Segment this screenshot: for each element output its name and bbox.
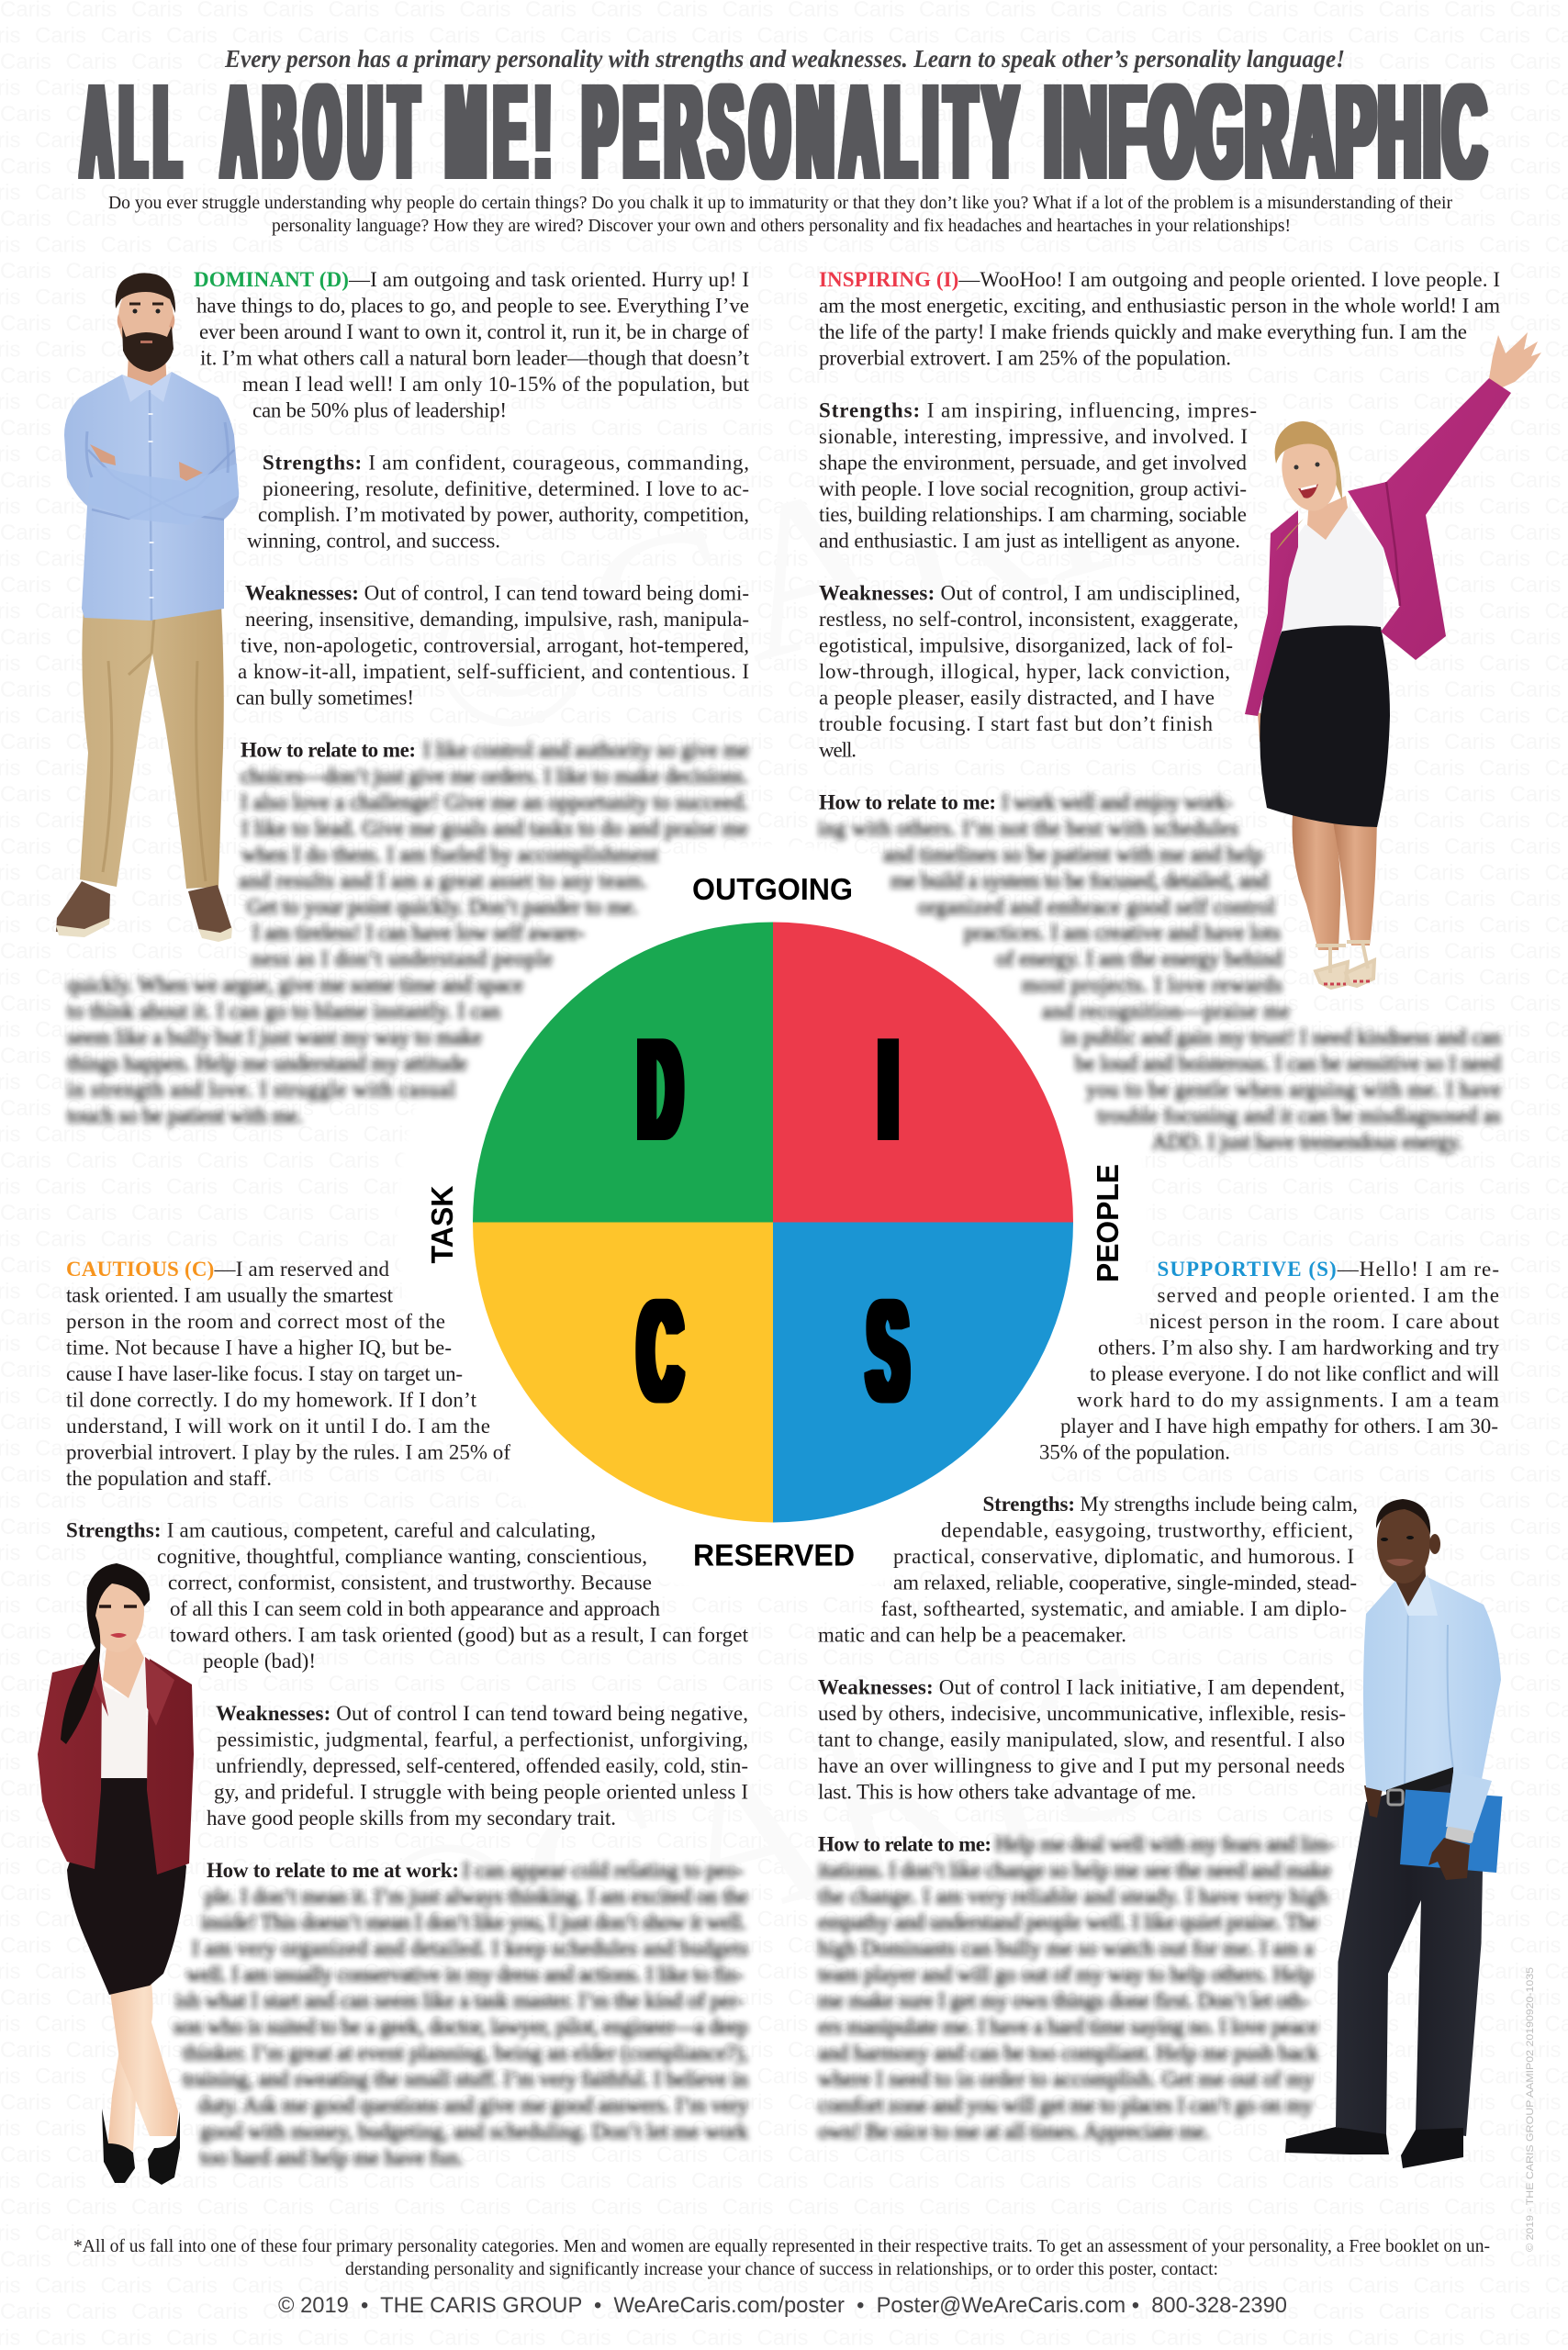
hair (1376, 1499, 1430, 1535)
supportive weaknesses: used by others, indecisive, uncommunicative, inflexible, resis- (818, 1702, 1346, 1725)
title: PERSONALITY (583, 60, 1017, 207)
dominant how to relate: I am tireless! I can have low self aware- (252, 922, 585, 945)
dominant how to relate: I also love a challenge! Give me an opportunity to succeed. (241, 790, 748, 813)
dominant strengths (247, 451, 749, 553)
legs (1293, 814, 1340, 950)
supportive strengths: am relaxed, reliable, cooperative, single-minded, stead- (893, 1572, 1357, 1595)
cautious strengths: cognitive, thoughtful, compliance wanting, conscientious, (157, 1545, 647, 1568)
supportive how to relate: itations. I don’t like change so help me see the need and make (818, 1859, 1331, 1882)
inspiring description (819, 268, 1500, 369)
face (91, 1570, 144, 1652)
cautious how to relate: son who is suited to be a geek, doctor, lawyer, pilot, engineer—a deep (174, 2016, 748, 2039)
supportive how to relate: and harmony and can be too compliant. Help me push back (818, 2042, 1318, 2065)
hair (1275, 421, 1337, 468)
dominant how to relate: choices—don’t just give me orders. I like to make decisions. (241, 765, 748, 788)
supportive description: 35% of the population. (1039, 1440, 1230, 1463)
supportive how to relate: the change. I am very reliable and steady. I have very high (818, 1885, 1329, 1908)
intro paragraph: Do you ever struggle understanding why people do certain things? Do you chalk it up to immaturity or that they don’t like you? What if a lot of the problem is a misunderstanding of their (108, 193, 1452, 213)
inspiring weaknesses: trouble focusing. I start fast but don’t finish (819, 712, 1214, 735)
cautious weaknesses: Weaknesses: Out of control I can tend toward being negative, (216, 1702, 748, 1725)
cautious how to relate: duty. Ask me good questions and give me good answers. I’m very (198, 2094, 749, 2117)
shoes (102, 2109, 135, 2183)
cautious how to relate: How to relate to me at work: (207, 1859, 459, 1882)
cautious description: the population and staff. (66, 1467, 272, 1490)
title: INFOGRAPHIC (1045, 57, 1485, 206)
cautious how to relate: inside! This doesn’t mean I don’t like you, I just don’t show it well. (201, 1911, 746, 1934)
dominant weaknesses: a know-it-all, impatient, self-sufficient, and contentious. I (238, 660, 749, 683)
inspiring how to relate: ADD. I just have tremendous energy. (1152, 1131, 1462, 1153)
inspiring how to relate: you to be gentle when arguing with me. I have (1086, 1079, 1501, 1102)
dominant weaknesses: tive, non-apologetic, controversial, arrogant, hot-tempered, (241, 634, 749, 657)
dominant description: can be 50% plus of leadership! (252, 398, 507, 421)
inspiring weaknesses: well. (819, 738, 857, 762)
dominant how to relate: How to relate to me: (241, 738, 416, 762)
supportive how to relate: empathy and understand people well. I like quiet praise. The (818, 1911, 1318, 1934)
hair (61, 1563, 150, 1744)
supportive description: served and people oriented. I am the (1157, 1283, 1499, 1307)
neck (127, 353, 167, 399)
inspiring strengths: sionable, interesting, impressive, and involved. I (819, 425, 1248, 448)
background watermark: ©CARIS (335, 1609, 1186, 2056)
folder (1400, 1790, 1502, 1873)
eyes and mouth (1294, 464, 1298, 470)
dominant description: ever been around I want to own it, control it, run it, be in charge of (199, 320, 749, 343)
collar (92, 1657, 174, 1726)
skirt (67, 1778, 186, 1995)
supportive how to relate: ers manipulate me. I have a hard time saying no. I love peace (818, 2016, 1318, 2039)
cautious weaknesses: gy, and prideful. I struggle with being people oriented unless I (214, 1780, 748, 1803)
inspiring how to relate: organized and embrace good self control (918, 895, 1275, 918)
watch (1445, 1827, 1474, 1843)
hair (116, 273, 175, 313)
supportive strengths: matic and can help be a peacemaker. (818, 1624, 1126, 1647)
cautious strengths: correct, conformist, consistent, and trustworthy. Because (168, 1572, 652, 1595)
intro paragraph (108, 193, 1452, 236)
supportive how to relate (818, 1832, 1335, 2143)
neck (1390, 1561, 1426, 1606)
shoes (1285, 2127, 1389, 2154)
cautious strengths: toward others. I am task oriented (good) but as a result, I can forget (170, 1624, 749, 1647)
footnote (73, 2236, 1490, 2279)
sandals (1316, 946, 1348, 988)
supportive description (1039, 1258, 1500, 1463)
tagline: Every person has a primary personality with strengths and weaknesses. Learn to speak other’s personality language! (224, 45, 1345, 73)
quadrant I (773, 922, 1073, 1223)
inspiring description: the life of the party! I make friends quickly and make everything fun. I am the (819, 320, 1467, 343)
supportive description: nicest person in the room. I care about (1149, 1310, 1500, 1333)
cautious how to relate: training, and sweating the small stuff. I’m very faithful. I believe in (183, 2068, 749, 2091)
cautious description: CAUTIOUS (C)—I am reserved and (66, 1258, 389, 1281)
inspiring how to relate: be loud and boisterous. I can be sensitive so I need (1075, 1052, 1502, 1075)
cuff (1446, 1772, 1492, 1833)
left hand (1258, 712, 1269, 744)
dominant how to relate: I like to lead. Give me goals and tasks to do and praise me (241, 817, 748, 840)
DISC letters: C (639, 1273, 681, 1431)
title: ABOUT (222, 58, 418, 206)
cautious description: time. Not because I have a higher IQ, but be- (66, 1336, 452, 1359)
cautious strengths: people (bad)! (203, 1650, 316, 1673)
supportive how to relate: where I need to in order to accomplish. Get me out of my (818, 2068, 1315, 2091)
supportive strengths: dependable, easygoing, trustworthy, efficient, (941, 1519, 1353, 1542)
cautious how to relate: I am very organized and detailed. I keep schedules and budgets (192, 1937, 748, 1960)
supportive how to relate: own! Be nice to me at all times. Appreciate me. (818, 2121, 1210, 2143)
dominant how to relate: things happen. Help me understand my attitude (67, 1052, 467, 1075)
supportive description: others. I’m also shy. I am hardworking and try (1098, 1336, 1500, 1359)
inspiring how to relate: most projects. I love rewards (1022, 974, 1282, 997)
blouse (97, 1652, 149, 1778)
panel: cautious (66, 1258, 749, 2169)
dominant description: DOMINANT (D)—I am outgoing and task oriented. Hurry up! I (194, 268, 749, 291)
eyes (129, 303, 163, 305)
inspiring how to relate: me build a system to be focused, detailed, and (890, 869, 1269, 892)
toes (1324, 981, 1371, 984)
supportive weaknesses: tant to change, easily manipulated, slow, and resentful. I also (818, 1728, 1345, 1751)
inspiring description: am the most energetic, exciting, and enthusiastic person in the whole world! I am (819, 294, 1500, 318)
face (118, 280, 174, 357)
trousers (1336, 1769, 1483, 2136)
cautious description (66, 1258, 510, 1490)
leg back (107, 2022, 151, 2151)
cautious strengths: Strengths: I am cautious, competent, careful and calculating, (66, 1519, 596, 1542)
face (1377, 1501, 1430, 1583)
intro paragraph: personality language? How they are wired? Discover your own and others personality and fix headaches and heartaches in your relationships! (272, 216, 1291, 236)
dominant description: mean I lead well! I am only 10-15% of the population, but (242, 373, 750, 396)
hair back (1276, 519, 1304, 551)
title (82, 57, 1485, 207)
inspiring strengths: with people. I love social recognition, group activi- (819, 477, 1247, 500)
hand raised (1489, 332, 1541, 389)
inspiring strengths: shape the environment, persuade, and get involved (819, 451, 1247, 474)
DISC letters: S (868, 1273, 908, 1431)
footnote: derstanding personality and significantly increase your chance of success in relationships, or to order this poster, contact: (345, 2259, 1218, 2279)
supportive description: to please everyone. I do not like conflict and will (1090, 1362, 1499, 1385)
cautious weaknesses: have good people skills from my secondary trait. (207, 1807, 616, 1830)
cautious weaknesses: unfriendly, depressed, self-centered, offended easily, cold, stin- (216, 1754, 748, 1777)
hand (1428, 1838, 1470, 1880)
supportive how to relate: How to relate to me: (818, 1832, 991, 1855)
background watermark: ©CARIS (399, 342, 1250, 789)
panel: supportive (818, 1258, 1500, 2143)
cautious description: person in the room and correct most of the (66, 1310, 445, 1333)
dominant weaknesses: can bully sometimes! (236, 687, 414, 709)
jacket (38, 1659, 194, 1874)
cautious description: til done correctly. I do my homework. If I don’t (66, 1388, 477, 1411)
title: ME! (446, 57, 551, 206)
supportive strengths: Strengths: My strengths include being calm, (982, 1493, 1358, 1516)
dominant description: have things to do, places to go, and people to see. Everything I’ve (196, 294, 749, 318)
cautious description: cause I have laser-like focus. I stay on target un- (66, 1362, 463, 1385)
inspiring weaknesses: Weaknesses: Out of control, I am undisciplined, (819, 582, 1240, 605)
supportive how to relate: team player and will go out of my way to help others. Help (818, 1964, 1314, 1986)
contact line: © 2019 • THE CARIS GROUP • WeAreCaris.com/poster • Poster@WeAreCaris.com • 800-328-2390 (278, 2293, 1287, 2318)
figure: inspiring woman (1245, 332, 1541, 988)
cautious strengths: of all this I can seem cold in both appearance and approach (170, 1597, 661, 1620)
supportive weaknesses: last. This is how others take advantage of me. (818, 1780, 1196, 1803)
cautious description: task oriented. I am usually the smartest (66, 1283, 394, 1307)
inspiring weaknesses: low-through, illogical, hyper, lack conviction, (819, 660, 1230, 683)
shoes (56, 881, 110, 934)
supportive how to relate: Help me deal well with my fears and lim- (995, 1832, 1335, 1855)
dominant how to relate: to think about it. I can go to blame instantly. I can (67, 1000, 501, 1023)
dominant how to relate: I like control and authority so give me (423, 738, 749, 762)
DISC letters (639, 1010, 908, 1431)
inspiring weaknesses: restless, no self-control, inconsistent, exaggerate, (819, 608, 1238, 631)
shirt (64, 372, 239, 621)
trousers (80, 605, 224, 889)
dominant strengths: complish. I’m motivated by power, authority, competition, (258, 503, 749, 526)
quadrant C (473, 1223, 773, 1522)
supportive description: player and I have high empathy for others. I am 30- (1060, 1415, 1498, 1438)
shirt (1363, 1576, 1501, 1831)
dominant weaknesses (236, 582, 749, 709)
neck (103, 1639, 144, 1698)
figure: cautious woman (38, 1563, 194, 2185)
hands (90, 444, 116, 465)
jacket right and arm (1348, 378, 1511, 660)
axis label: task: TASK (425, 1185, 459, 1263)
dominant weaknesses: neering, insensitive, demanding, impulsive, rash, manipula- (245, 608, 749, 631)
supportive how to relate: high Dominants can bully me so watch out for me. I am a (818, 1937, 1314, 1960)
supportive weaknesses: have an over willingness to give and I put my personal needs (818, 1754, 1345, 1777)
supportive how to relate: comfort zone and you will get me to places I can’t go on my (818, 2094, 1313, 2117)
cautious how to relate: too hard and help me have fun. (200, 2146, 464, 2169)
vertical copyright: © 2019 - THE CARIS GROUP AAMIP02 20190920-1035 (1525, 1967, 1536, 2252)
supportive strengths (818, 1493, 1358, 1647)
left hand (1364, 1785, 1383, 1818)
skirt (1260, 624, 1390, 827)
supportive weaknesses (818, 1676, 1346, 1803)
cautious how to relate: ish what I start and can seem like a task master. I’m the kind of per- (175, 1989, 744, 2012)
cautious strengths (66, 1519, 749, 1673)
dominant strengths: Strengths: I am confident, courageous, commanding, (263, 451, 749, 474)
cautious how to relate: ple. I don’t mean it. I’m just always thinking. I am excited on the (205, 1885, 748, 1908)
eyes and lips (99, 1605, 137, 1608)
figure: supportive man (1285, 1499, 1502, 2168)
dominant weaknesses: Weaknesses: Out of control, I can tend toward being domi- (245, 582, 749, 605)
inspiring strengths: ties, building relationships. I am charming, sociable (819, 503, 1247, 526)
supportive strengths: fast, softhearted, systematic, and amiable. I am diplo- (881, 1597, 1347, 1620)
cautious weaknesses: pessimistic, judgmental, fearful, a perfectionist, unforgiving, (217, 1728, 748, 1751)
dominant description (194, 268, 750, 421)
supportive strengths: practical, conservative, diplomatic, and humorous. I (893, 1545, 1354, 1568)
quadrant D (473, 922, 773, 1223)
cautious weaknesses (207, 1702, 748, 1830)
supportive description: work hard to do my assignments. I am a team (1077, 1388, 1499, 1411)
supportive how to relate: me make sure I get my own things done first. Don’t let oth- (818, 1989, 1310, 2012)
cautious how to relate (174, 1859, 749, 2169)
inspiring how to relate: I work well and enjoy work- (1002, 790, 1233, 813)
axis label: reserved: RESERVED (693, 1539, 855, 1572)
inspiring how to relate: How to relate to me: (819, 790, 996, 813)
inspiring how to relate: practices. I am creative and have lots (964, 922, 1281, 945)
eyes and mouth (1381, 1538, 1388, 1541)
inspiring how to relate: and timelines so be patient with me and help (883, 843, 1263, 866)
neck (1307, 496, 1348, 540)
inspiring weaknesses: a people pleaser, easily distracted, and I have (819, 687, 1215, 709)
inspiring weaknesses (819, 582, 1240, 762)
cautious description: understand, I will work on it until I do. I am the (66, 1415, 490, 1438)
dominant how to relate: seem like a bully but I just want my way to make (67, 1026, 482, 1049)
inspiring how to relate: and recognition—praise me (1042, 1000, 1290, 1023)
dominant how to relate: when I do them. I am fueled by accomplishment (241, 843, 659, 866)
dominant how to relate: quickly. When we argue, give me some time and space (67, 974, 523, 997)
inspiring description: INSPIRING (I)—WooHoo! I am outgoing and people oriented. I love people. I (819, 268, 1500, 291)
dominant strengths: pioneering, resolute, definitive, determined. I love to ac- (263, 477, 749, 500)
dominant how to relate (67, 738, 749, 1127)
DISC circle chart (473, 922, 1073, 1522)
dominant how to relate: touch so be patient with me. (67, 1104, 303, 1127)
belt (1386, 1767, 1453, 1804)
blouse (1281, 506, 1383, 632)
inspiring how to relate: trouble focusing and it can be misdiagnosed as (1097, 1104, 1501, 1127)
dominant how to relate: in strength and love. I struggle with casual (67, 1079, 455, 1102)
leg front (110, 1983, 178, 2136)
cautious how to relate: good with money, budgeting, and scheduling. Don’t let me work (200, 2121, 749, 2143)
inspiring strengths: and enthusiastic. I am just as intelligent as anyone. (819, 530, 1240, 553)
dominant how to relate: ness as I don’t understand people (252, 947, 553, 970)
cautious description: proverbial introvert. I play by the rules. I am 25% of (66, 1440, 510, 1463)
beard (122, 326, 174, 372)
figure: dominant man (56, 273, 239, 942)
supportive weaknesses: Weaknesses: Out of control I lack initiative, I am dependent, (818, 1676, 1345, 1698)
inspiring how to relate: in public and gain my trust! I need kindness and can (1061, 1026, 1502, 1049)
dominant strengths: winning, control, and success. (247, 530, 500, 553)
cautious how to relate: I can appear cold relating to peo- (463, 1859, 744, 1882)
inspiring description: proverbial extrovert. I am 25% of the population. (819, 346, 1231, 369)
axis label: outgoing: OUTGOING (692, 872, 853, 906)
dominant description: it. I’m what others call a natural born leader—though that doesn’t (200, 346, 750, 369)
inspiring how to relate (818, 790, 1502, 1153)
inspiring how to relate: ing with others. I’m not the best with schedules (818, 817, 1238, 840)
jacket left (1245, 510, 1298, 716)
inspiring how to relate: of energy. I am the energy behind (996, 947, 1283, 970)
DISC letters: D (639, 1012, 681, 1169)
face (1275, 430, 1343, 516)
footnote: *All of us fall into one of these four primary personality categories. Men and women are equally represented in their respective traits. To get an assessment of your personality, a Free booklet on un- (73, 2236, 1490, 2256)
inspiring weaknesses: egotistical, impulsive, disorganized, lack of fol- (819, 634, 1233, 657)
cautious how to relate: well. I am usually conservative in my dress and actions. I like to fin- (186, 1964, 744, 1986)
title: ALL (82, 57, 180, 206)
supportive description: SUPPORTIVE (S)—Hello! I am re- (1157, 1258, 1499, 1281)
cautious how to relate: thinker. I’m great at event planning, being an elder (compliance?), (183, 2042, 748, 2065)
dominant how to relate: and results and I am a great asset to any team. (239, 869, 647, 892)
DISC letters: I (879, 1010, 898, 1169)
panel: dominant (67, 268, 750, 1127)
quadrant S (773, 1223, 1073, 1522)
inspiring strengths: Strengths: I am inspiring, influencing, impres- (819, 398, 1257, 421)
dominant how to relate: Get to your point quickly. Don’t pander to me. (247, 895, 638, 918)
axis label: people: PEOPLE (1091, 1164, 1125, 1282)
inspiring strengths (819, 398, 1257, 553)
panel: inspiring (818, 268, 1502, 1153)
